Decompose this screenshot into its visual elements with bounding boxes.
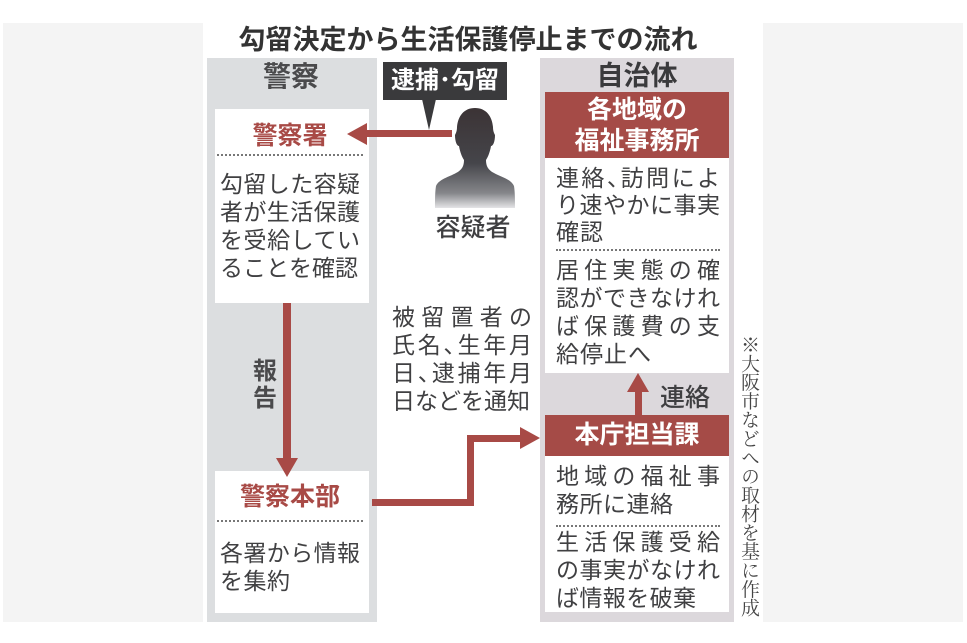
icon: suspect silhouette bbox=[435, 108, 515, 208]
panel: regional welfare office bbox=[545, 92, 729, 373]
text: notification details: 日などを通知 bbox=[392, 388, 530, 414]
arrow: suspect to police station bbox=[347, 123, 452, 145]
panel: police station bbox=[215, 109, 369, 303]
arrow: station to headquarters bbox=[276, 303, 298, 477]
station heading: 警察署 bbox=[252, 122, 328, 150]
panel: head office section bbox=[545, 415, 729, 612]
welfare office header bbox=[545, 92, 729, 158]
welfare office text 1: 連絡、訪問によ bbox=[556, 165, 720, 191]
head office text 2: ば情報を破棄 bbox=[556, 585, 696, 611]
head office header bbox=[545, 415, 729, 456]
municipality heading: 自治体 bbox=[596, 61, 678, 91]
head office text 1 bbox=[556, 463, 720, 517]
panel: police headquarters bbox=[215, 471, 369, 613]
panel: municipality bbox=[540, 58, 734, 622]
station text: を受給してい bbox=[220, 227, 360, 253]
label: suspect: 容疑者 bbox=[435, 214, 510, 242]
note: source: ※大阪市などへの取材を基に作成 bbox=[738, 335, 759, 617]
headquarters text: 各署から情報 bbox=[220, 540, 360, 566]
welfare office header: 福祉事務所 bbox=[574, 127, 700, 155]
station text bbox=[220, 171, 360, 281]
welfare office text 2: 居住実態の確 bbox=[556, 257, 720, 283]
police heading: 警察 bbox=[263, 61, 319, 92]
station text: 勾留した容疑 bbox=[220, 171, 360, 197]
callout: arrest and detention bbox=[383, 62, 507, 130]
head office text 2: 生活保護受給 bbox=[556, 529, 720, 555]
label: report bbox=[253, 358, 277, 412]
welfare office text 1: 確認 bbox=[556, 219, 603, 245]
head office text 2: の事実がなけれ bbox=[556, 557, 720, 583]
label: contact: 連絡 bbox=[660, 384, 710, 412]
panel: police bbox=[207, 58, 377, 622]
text: notification details: 被留置者の bbox=[392, 304, 532, 330]
welfare office text 1: り速やかに事実 bbox=[556, 192, 720, 218]
station text: 者が生活保護 bbox=[220, 199, 360, 225]
headquarters text bbox=[220, 540, 360, 594]
arrow: head office to welfare office bbox=[627, 373, 649, 415]
text: notification details: 氏名、生年月 bbox=[392, 332, 532, 358]
label: report: 告 bbox=[253, 385, 277, 412]
welfare office text 2: 認ができなけれ bbox=[556, 285, 720, 311]
station text: ることを確認 bbox=[220, 255, 358, 281]
head office header: 本庁担当課 bbox=[574, 421, 700, 449]
label: report: 報 bbox=[253, 358, 277, 385]
head office text 1: 地域の福祉事 bbox=[556, 463, 720, 489]
head office text 1: 務所に連絡 bbox=[556, 491, 673, 517]
headquarters text: を集約 bbox=[220, 568, 290, 594]
right margin panel bbox=[763, 23, 963, 622]
welfare office text 1 bbox=[556, 165, 720, 245]
text: notification details: 日、逮捕年月 bbox=[392, 360, 532, 386]
left margin panel bbox=[3, 23, 203, 622]
welfare office text 2: ば保護費の支 bbox=[556, 313, 720, 339]
headquarters heading: 警察本部 bbox=[240, 483, 340, 511]
head office text 2 bbox=[556, 529, 720, 611]
callout: arrest and detention: 逮捕･勾留 bbox=[391, 67, 499, 94]
arrow: headquarters to head office bbox=[372, 427, 540, 506]
welfare office text 2: 給停止へ bbox=[556, 341, 651, 367]
text: notification details bbox=[392, 304, 532, 414]
welfare office header: 各地域の bbox=[587, 96, 687, 124]
welfare office text 2 bbox=[556, 257, 720, 367]
title: 勾留決定から生活保護停止までの流れ bbox=[238, 25, 698, 55]
